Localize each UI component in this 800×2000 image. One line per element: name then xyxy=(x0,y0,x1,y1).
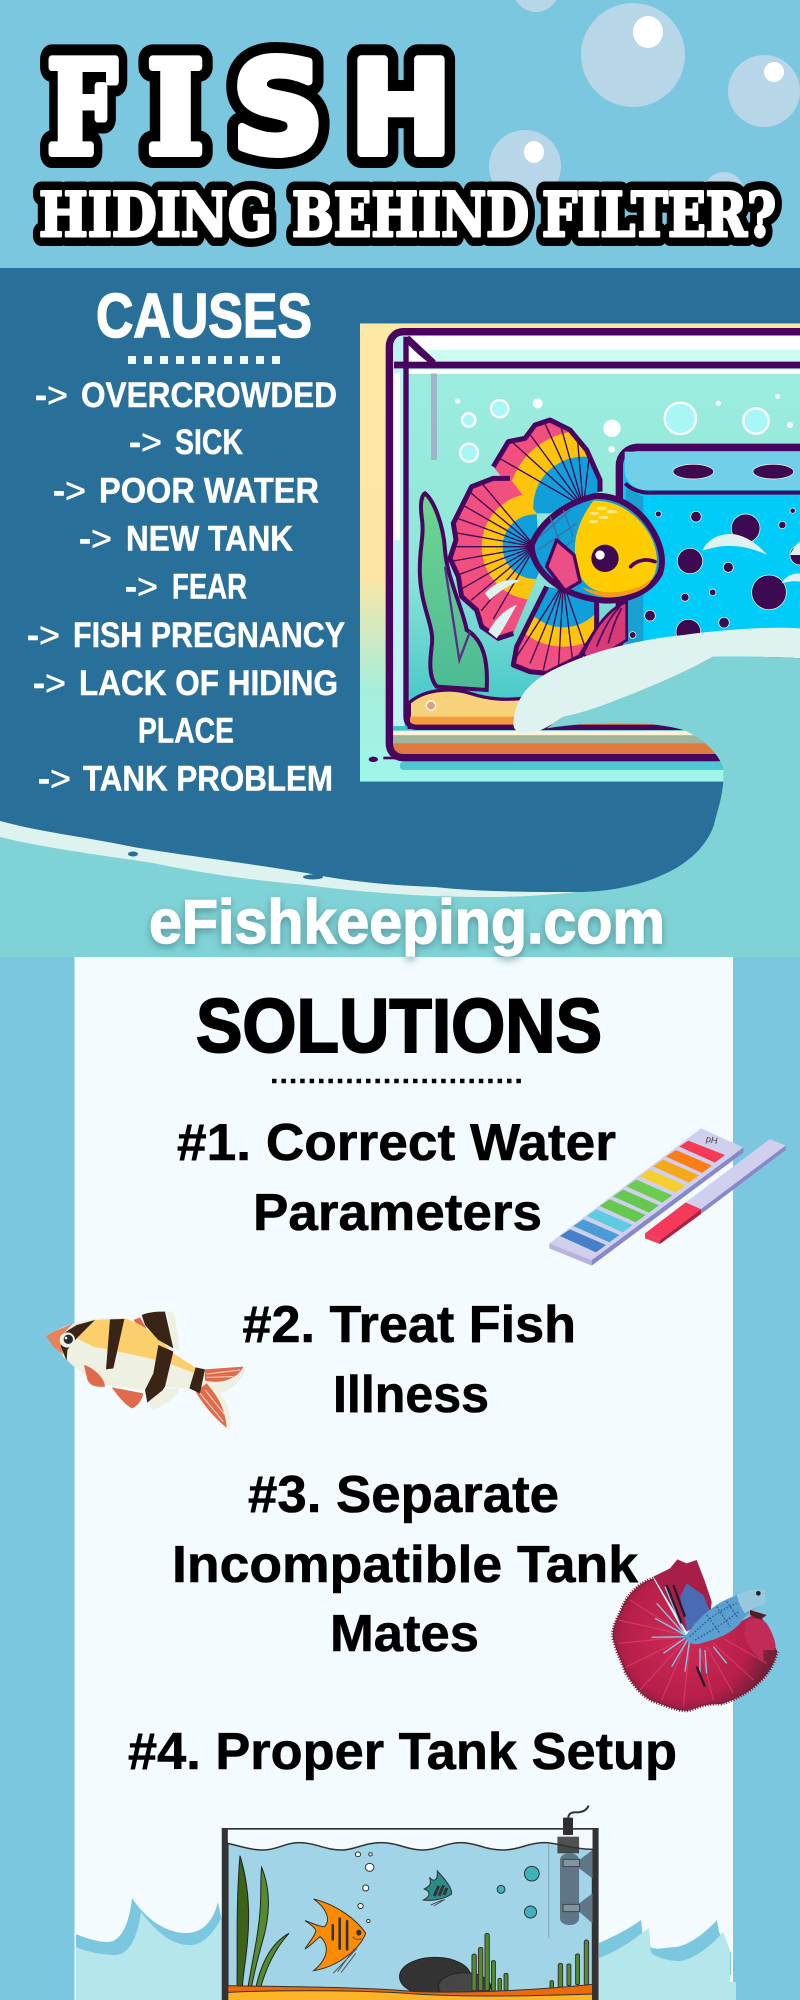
panel: teal causes background xyxy=(0,268,800,957)
causes list: -> xyxy=(33,664,66,703)
header background xyxy=(0,0,800,268)
solution 2 text: Illness xyxy=(333,1366,489,1424)
illustration: betta fish hiding at a sponge filter xyxy=(360,323,800,782)
solution 3 text: #3. Separate xyxy=(248,1466,559,1524)
subtitle: hiding behind filter xyxy=(39,180,776,251)
title: FISH: F xyxy=(47,34,117,184)
lower fin xyxy=(510,586,628,676)
wave stripe under blue shape xyxy=(0,821,577,897)
upper fin xyxy=(491,418,602,514)
causes list: -> xyxy=(27,616,60,655)
solution 1 text: Parameters xyxy=(253,1184,542,1242)
causes list: FISH PREGNANCY xyxy=(73,616,345,655)
title: FISH: H xyxy=(350,35,452,184)
causes list: -> xyxy=(35,376,68,415)
title: FISH: I xyxy=(147,34,204,184)
title: FISH: I xyxy=(147,34,204,184)
causes list: -> xyxy=(125,568,158,606)
tall plants xyxy=(237,1856,289,1992)
subtitle: hiding behind filter: HIDING xyxy=(39,180,272,251)
aquarium tank glass xyxy=(389,332,800,758)
solution 2 text xyxy=(242,1296,576,1424)
image background xyxy=(360,323,800,782)
causes list: -> xyxy=(53,472,86,510)
causes list: NEW TANK xyxy=(126,520,293,558)
causes list: TANK PROBLEM xyxy=(83,760,333,798)
solution 2 text: #2. Treat Fish xyxy=(242,1296,576,1354)
causes list: OVERCROWDED xyxy=(81,376,337,415)
website label: eFishkeeping.com xyxy=(149,888,665,957)
illustration: aquarium setup xyxy=(222,1806,599,2000)
icon: pH test strips xyxy=(549,1128,786,1266)
solution 1 text: #1. Correct Water xyxy=(177,1114,616,1172)
causes list: LACK OF HIDING xyxy=(79,664,338,703)
dotted divider: solutions xyxy=(272,1079,525,1083)
solution 1 text xyxy=(177,1114,616,1242)
main tail fan xyxy=(448,476,539,641)
betta fish xyxy=(450,420,662,673)
causes list: FEAR xyxy=(172,568,247,606)
solution 3 text xyxy=(172,1466,638,1663)
subtitle: hiding behind filter: HIDING xyxy=(39,180,272,251)
sand xyxy=(228,1984,593,2000)
solution 3 text: Mates xyxy=(330,1605,479,1663)
icon: pH test strips: pH xyxy=(705,1134,719,1146)
sand xyxy=(408,688,657,729)
solution 3 text: Incompatible Tank xyxy=(172,1536,638,1594)
fish eye and mouth xyxy=(591,545,655,572)
solution 4 text: #4. Proper Tank Setup xyxy=(128,1723,677,1781)
tank frame lines xyxy=(369,332,800,762)
causes list: -> xyxy=(79,520,112,558)
subtitle: hiding behind filter: BEHIND xyxy=(292,180,529,251)
bubbles xyxy=(355,1852,539,1923)
sponge filter xyxy=(619,447,800,661)
panel: solutions xyxy=(0,957,800,2000)
heading: solutions: SOLUTIONS xyxy=(196,984,602,1069)
small teal fish xyxy=(423,1871,452,1906)
icon: tiger barb fish xyxy=(46,1311,247,1429)
causes list xyxy=(27,376,345,798)
bottom water waves xyxy=(76,1898,736,2000)
heading: causes: CAUSES xyxy=(96,282,312,351)
aquatic grass xyxy=(472,1933,589,1992)
causes list: SICK xyxy=(175,423,243,462)
decorative bubbles xyxy=(489,0,800,212)
bubbles in the tank xyxy=(455,394,793,462)
causes list: PLACE xyxy=(138,712,234,750)
panel: blue causes shape xyxy=(0,268,800,892)
subtitle: hiding behind filter: BEHIND xyxy=(292,180,529,251)
fish body and head xyxy=(532,496,662,601)
tank frame xyxy=(222,1828,599,2000)
causes list: -> xyxy=(38,760,71,798)
title: FISH: S xyxy=(232,34,324,183)
title: FISH: S xyxy=(232,34,324,183)
heater xyxy=(549,1806,593,1938)
title: FISH: H xyxy=(350,35,452,184)
angelfish xyxy=(305,1899,366,1973)
causes list: POOR WATER xyxy=(99,472,319,510)
causes list: -> xyxy=(129,423,162,462)
water xyxy=(228,1843,593,2000)
wave overlay: pale crest xyxy=(513,628,800,733)
plant xyxy=(420,493,487,690)
title: FISH xyxy=(47,34,452,184)
dotted divider: causes xyxy=(128,356,280,364)
wave overlay: teal body xyxy=(547,657,800,790)
rocks xyxy=(400,1957,491,2000)
icon: red and blue betta fish xyxy=(613,1559,777,1711)
title: FISH: F xyxy=(47,34,117,184)
pectoral fin xyxy=(547,540,580,591)
